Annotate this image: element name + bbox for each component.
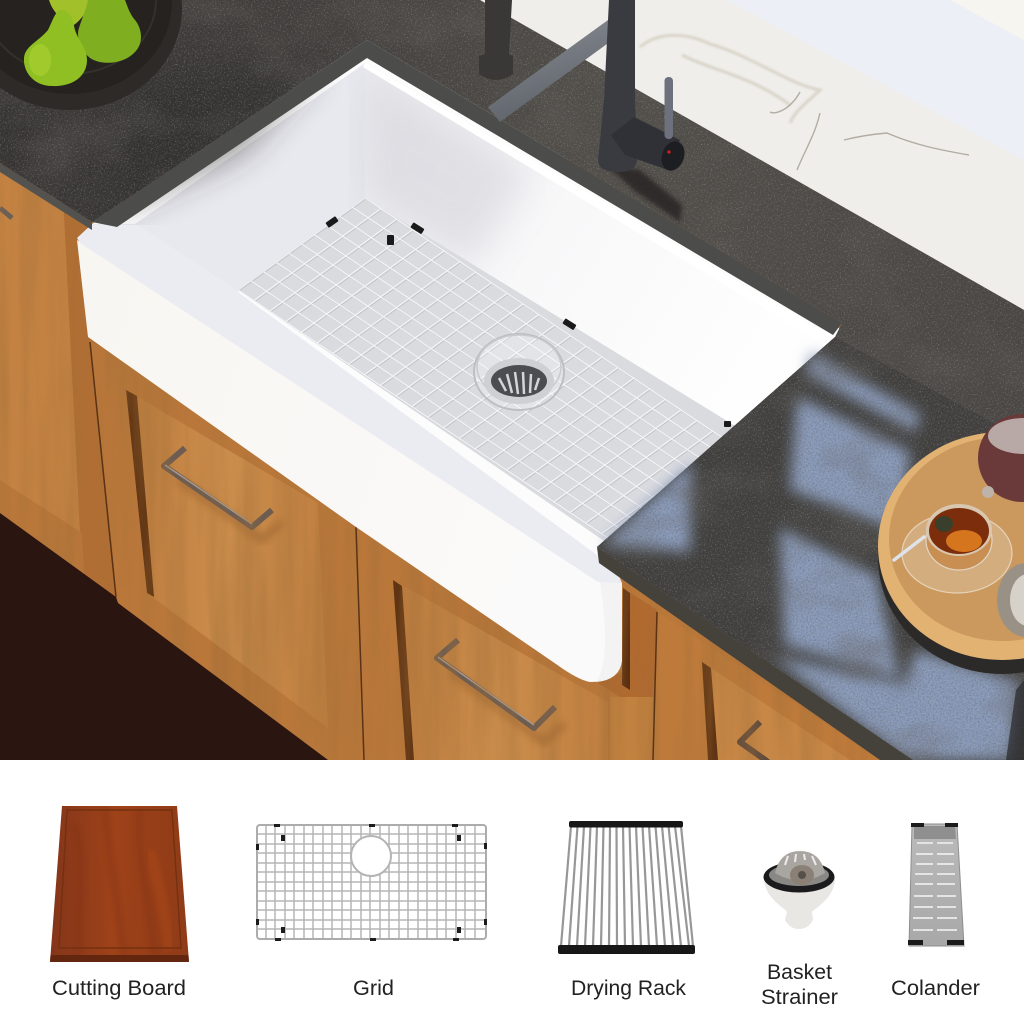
cabinets (0, 160, 1024, 762)
back wall (365, 68, 484, 224)
countertop (0, 0, 1024, 760)
cabinet: fourth door (702, 662, 850, 760)
faucet (479, 0, 688, 222)
apron right cap (596, 660, 622, 682)
counter left edge (0, 163, 92, 230)
basin (136, 64, 734, 541)
plate of pears (0, 0, 182, 110)
back lip (362, 63, 562, 186)
accessory: basket strainer (764, 851, 835, 929)
apron front (77, 240, 622, 682)
faucet column (598, 0, 637, 172)
counter front edge (597, 547, 913, 760)
wire shadows (239, 199, 745, 545)
colander end caps (908, 823, 964, 945)
grid clips (256, 824, 487, 941)
window reflection patches (603, 352, 1020, 760)
sink back rim (92, 160, 840, 555)
pear right (78, 0, 141, 63)
cabinet: third door (393, 580, 657, 760)
spoon (894, 537, 924, 560)
label: grid: Grid (353, 977, 394, 1000)
tray shadow (878, 440, 1024, 674)
marble backsplash (480, 0, 1024, 310)
rim top (77, 224, 622, 583)
faucet lever (664, 77, 673, 139)
label: cutting board: Cutting Board (52, 977, 186, 1000)
dark streak (1006, 680, 1024, 760)
label: basket strainer: Basket (767, 961, 832, 984)
faucet sprayer arm (488, 20, 622, 122)
serving tray (878, 414, 1024, 674)
accessory: cutting board (50, 806, 190, 962)
farmhouse sink (77, 50, 842, 682)
faucet handle body (611, 117, 680, 170)
small glass (997, 563, 1024, 637)
wires (238, 198, 744, 544)
wood grain texture (0, 188, 816, 760)
drain cut-out (351, 836, 391, 876)
granite speckle texture (0, 0, 1024, 760)
faucet shadow (606, 165, 682, 222)
faucet left base (479, 0, 513, 80)
accessory: drying rack (558, 821, 695, 954)
grid in basin (238, 198, 745, 545)
door handle (164, 448, 272, 527)
accessory: colander (908, 823, 964, 946)
label: basket strainer: Strainer (761, 986, 838, 1009)
colander slits (913, 843, 957, 930)
dark stains (110, 60, 320, 210)
plate (0, 0, 182, 110)
accessory: grid (256, 824, 487, 941)
pear back (49, 0, 92, 26)
cabinet: second door (90, 341, 318, 716)
wood streaks (75, 806, 155, 958)
granite light speckle (0, 0, 1024, 760)
counter rim band (92, 40, 842, 335)
label: basket strainer (761, 961, 838, 1009)
grid clips (325, 216, 731, 427)
left wall (135, 63, 365, 292)
label: colander: Colander (891, 977, 980, 1000)
tea cup (926, 510, 992, 570)
cabinet: left door (0, 163, 116, 597)
door handle (437, 640, 555, 728)
marble veins (640, 35, 820, 123)
label: drying rack: Drying Rack (571, 977, 686, 1000)
small drawer (598, 593, 657, 706)
handle shadow (178, 480, 282, 540)
mottled stains (0, 0, 1024, 760)
drain strainer (474, 334, 564, 410)
handle shadow (450, 672, 564, 742)
basin floor (238, 198, 745, 545)
strainer body (764, 878, 835, 929)
counter front right base (597, 337, 1024, 760)
rubber ring (764, 862, 834, 892)
teapot (978, 414, 1024, 502)
door panel (152, 409, 318, 716)
saucer (902, 513, 1012, 593)
tray base (889, 437, 1024, 641)
basket dome (775, 851, 825, 880)
floor (0, 513, 328, 760)
pear left (24, 10, 87, 86)
kitchen photo illustration (0, 0, 1024, 762)
door gaps (90, 342, 657, 760)
tray rim (878, 432, 1024, 660)
door handle (740, 722, 768, 762)
